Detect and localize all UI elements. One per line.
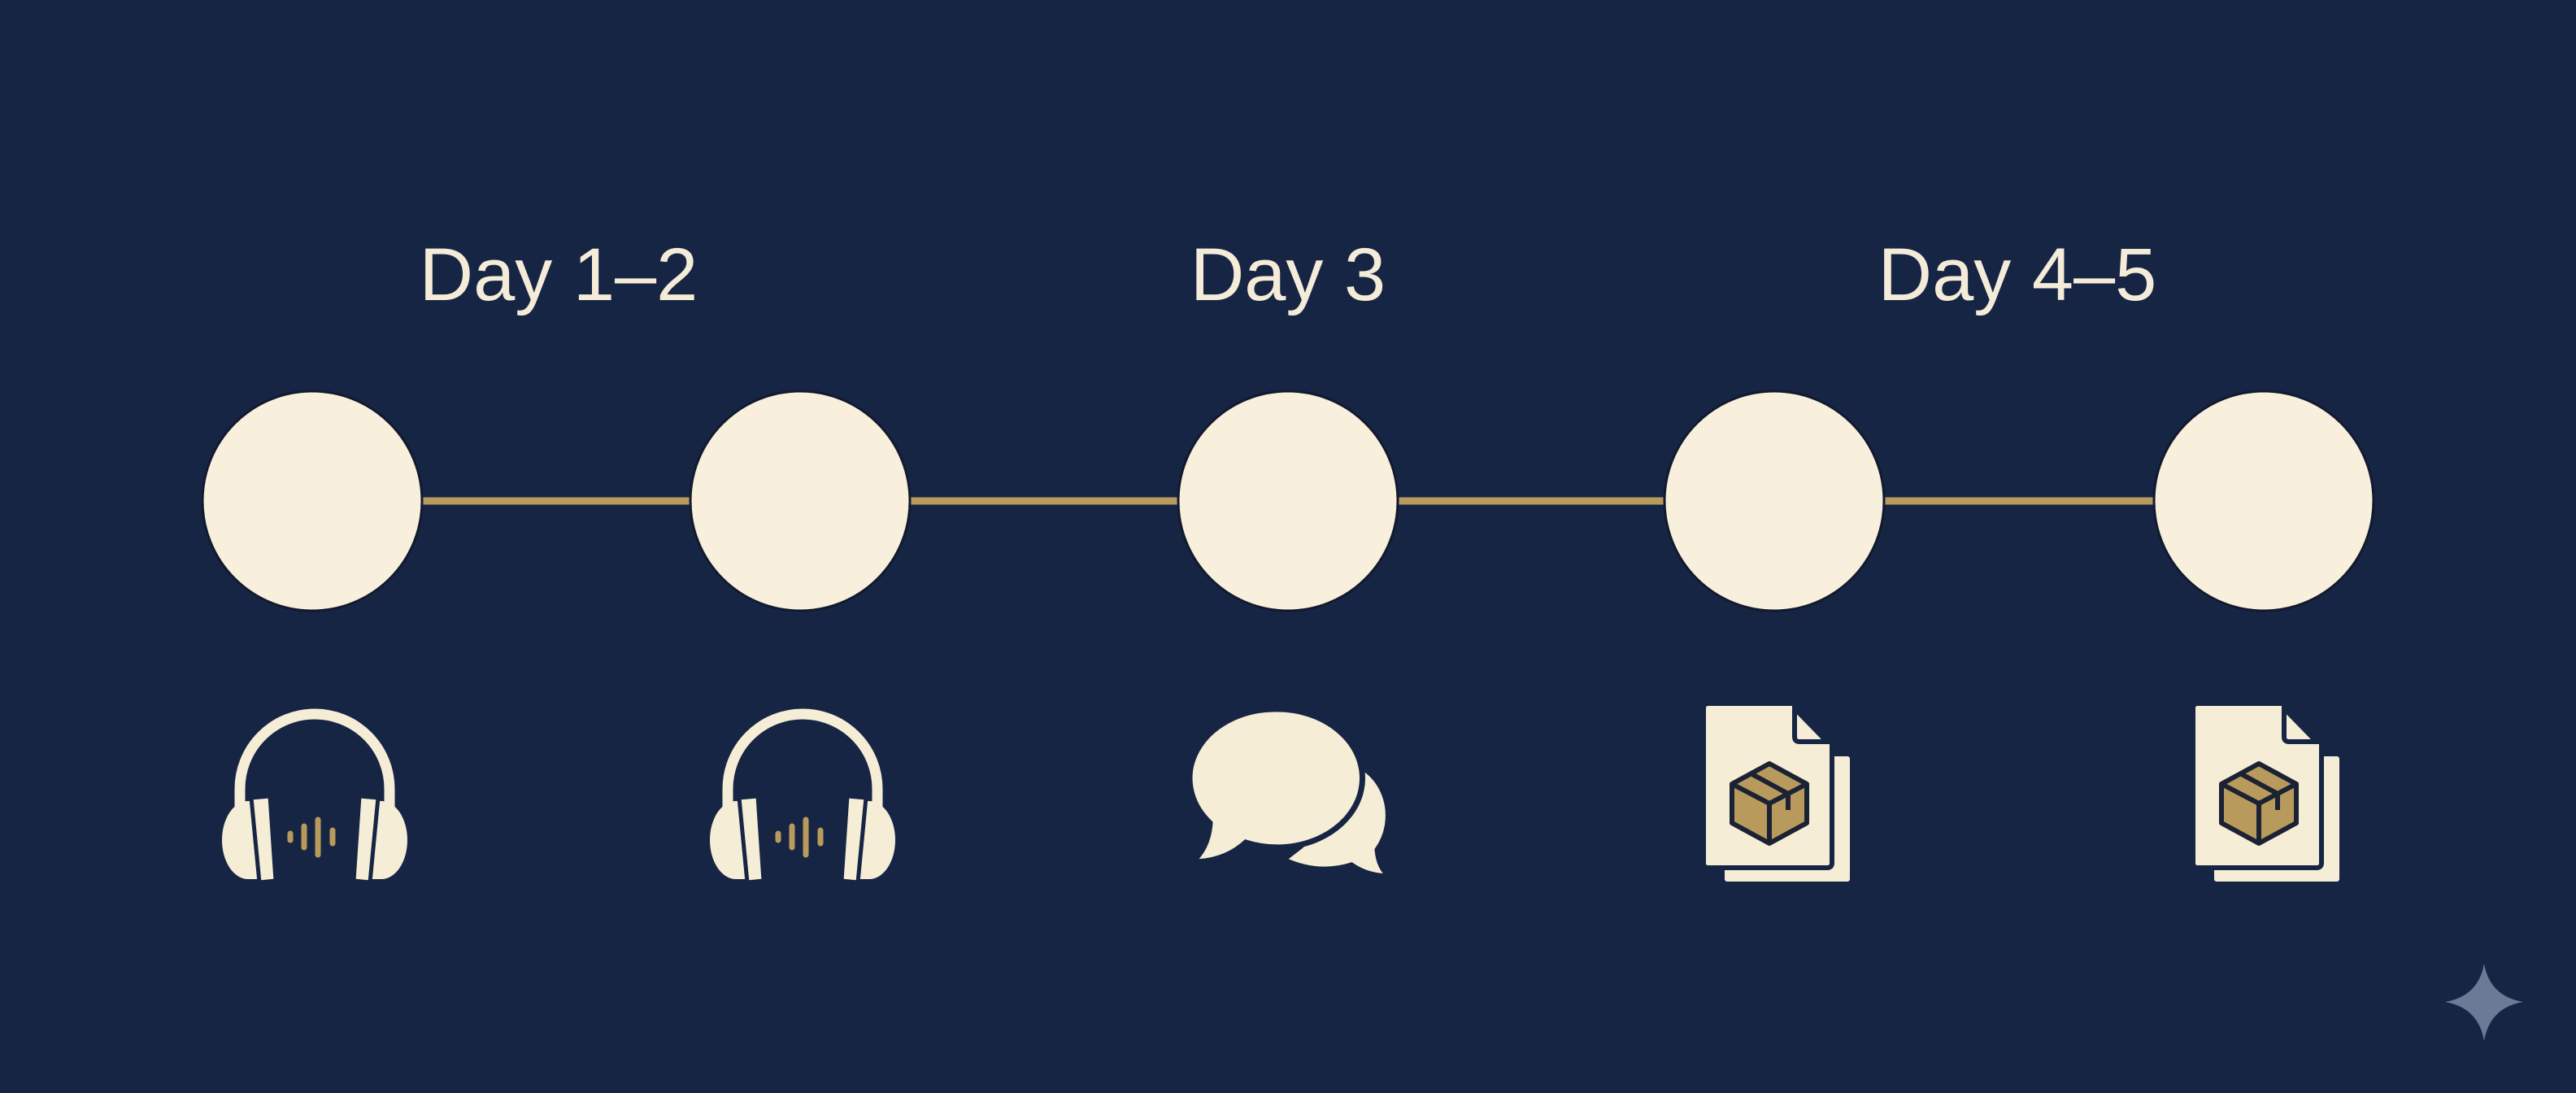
label: Day 3: Day 3: [1190, 233, 1386, 316]
icon: headphones 1: [222, 714, 407, 882]
label: Day 4–5: Day 4–5: [1878, 233, 2156, 316]
timeline nodes: [202, 391, 2374, 611]
icon: sparkle: [2445, 964, 2523, 1041]
icon: document with box 1: [1704, 703, 1852, 884]
icon: headphones 2: [710, 714, 895, 882]
icon: speech bubbles: [1190, 709, 1390, 877]
timeline line: [312, 498, 2264, 504]
label: Day 1–2: Day 1–2: [420, 233, 698, 316]
icon: document with box 2: [2193, 703, 2342, 884]
